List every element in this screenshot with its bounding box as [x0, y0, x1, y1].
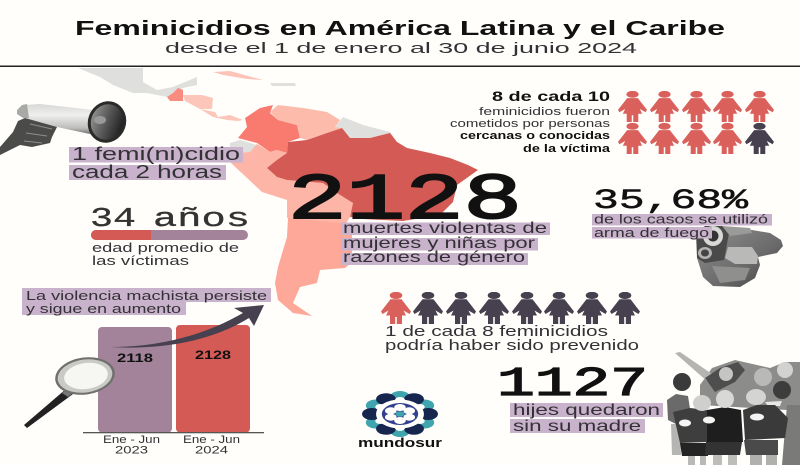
- icon: hand with gun: [696, 226, 783, 287]
- bar chart: 2023 vs 2024: [83, 325, 264, 456]
- text: 8 de cada 10: 8 de cada 10: [492, 88, 610, 104]
- Mexico: [78, 68, 197, 97]
- stat: 34 años: años: [153, 205, 250, 235]
- Chile and Argentina: [275, 218, 352, 316]
- callout: 1 femicidio cada 2 horas: 1 femi(ni)cidio: [72, 144, 240, 164]
- logo: mundosur: [358, 391, 442, 450]
- bar 2024: [176, 325, 250, 432]
- stat: 1127 children: [497, 362, 663, 435]
- stat: 1127 children: 1127: [497, 362, 648, 408]
- arrow: upward trend: [110, 305, 264, 348]
- stat: 1127 children: hijes quedaron: [513, 402, 660, 419]
- map of Latin America: [78, 68, 478, 316]
- Caribbean islands: [213, 71, 296, 86]
- axis labels: 2024: [195, 444, 228, 456]
- big number: 2128 deaths: [288, 164, 550, 266]
- text: 8 de cada 10: cometidos por personas: [450, 118, 611, 130]
- Peru and Bolivia: [230, 144, 353, 225]
- stat: 34 años: edad promedio de: [92, 240, 239, 255]
- text: 8 de cada 10: cercanas o conocidas: [460, 130, 610, 142]
- heading: violence persists: [22, 288, 271, 316]
- icon: magnifying glass: [24, 354, 117, 428]
- text: 8 de cada 10: de la víctima: [523, 143, 611, 155]
- axis labels: [103, 434, 240, 456]
- bar 2024: 2128: [195, 348, 231, 362]
- bar 2023: 2118: [117, 351, 153, 365]
- callout: 1 femicidio cada 2 horas: cada 2 horas: [72, 162, 222, 182]
- Brazil: [267, 128, 478, 221]
- big number: 2128 deaths: 2128: [288, 164, 522, 238]
- Ecuador: [230, 140, 257, 153]
- text: 1 de cada 8: [385, 323, 639, 354]
- pictogram: 1 of 8 people: [381, 292, 640, 324]
- photo: children looking up: [667, 352, 800, 465]
- bar 2023: [98, 327, 172, 432]
- stat: 34 años: las víctimas: [92, 253, 190, 268]
- icon: megaphone with hand: [0, 96, 132, 155]
- text: 8 de cada 10: feminicidios fueron: [479, 106, 610, 118]
- heading: violence persists: La violencia machista persiste: [26, 289, 267, 303]
- axis labels: Ene - Jun: [183, 434, 240, 446]
- title: Feminicidios en América Latina y el Caribe: [75, 18, 725, 40]
- stat: 34 años: [90, 205, 250, 268]
- big number: 2128 deaths: mujeres y niñas por: [343, 235, 536, 252]
- age bar: [91, 230, 248, 240]
- axis labels: Ene - Jun: [103, 434, 160, 446]
- title: desde el 1 de enero al 30 de junio 2024: [165, 40, 637, 57]
- big number: 2128 deaths: muertes violentas de: [343, 220, 547, 237]
- logo: mundosur: mundosur: [358, 435, 442, 450]
- axis labels: 2023: [115, 444, 148, 456]
- Colombia: [238, 105, 300, 153]
- Honduras and neighbours: [183, 95, 213, 109]
- stat: 34 años: 34: [90, 205, 136, 235]
- pictogram: 8 of 10 people: [618, 91, 774, 154]
- text: 1 de cada 8: podría haber sido prevenido: [385, 337, 639, 354]
- Guatemala: [167, 88, 183, 101]
- stat: 1127 children: sin su madre: [513, 418, 641, 435]
- Venezuela: [270, 105, 342, 140]
- Guianas: [335, 117, 397, 140]
- stat: 35,68% firearm: 35,68%: [593, 186, 748, 217]
- stat: 35,68% firearm: [592, 186, 772, 240]
- stat: 35,68% firearm: arma de fuego: [594, 225, 709, 240]
- big number: 2128 deaths: razones de género: [343, 249, 525, 266]
- title: [75, 18, 725, 57]
- text: 8 de cada 10: [450, 88, 611, 155]
- text: 1 de cada 8: 1 de cada 8 feminicidios: [385, 323, 608, 340]
- callout: 1 femicidio cada 2 horas: [69, 144, 243, 182]
- Panama and Costa Rica: [200, 109, 243, 121]
- stat: 35,68% firearm: de los casos se utilizó: [594, 212, 768, 226]
- heading: violence persists: y sigue en aumento: [26, 302, 181, 316]
